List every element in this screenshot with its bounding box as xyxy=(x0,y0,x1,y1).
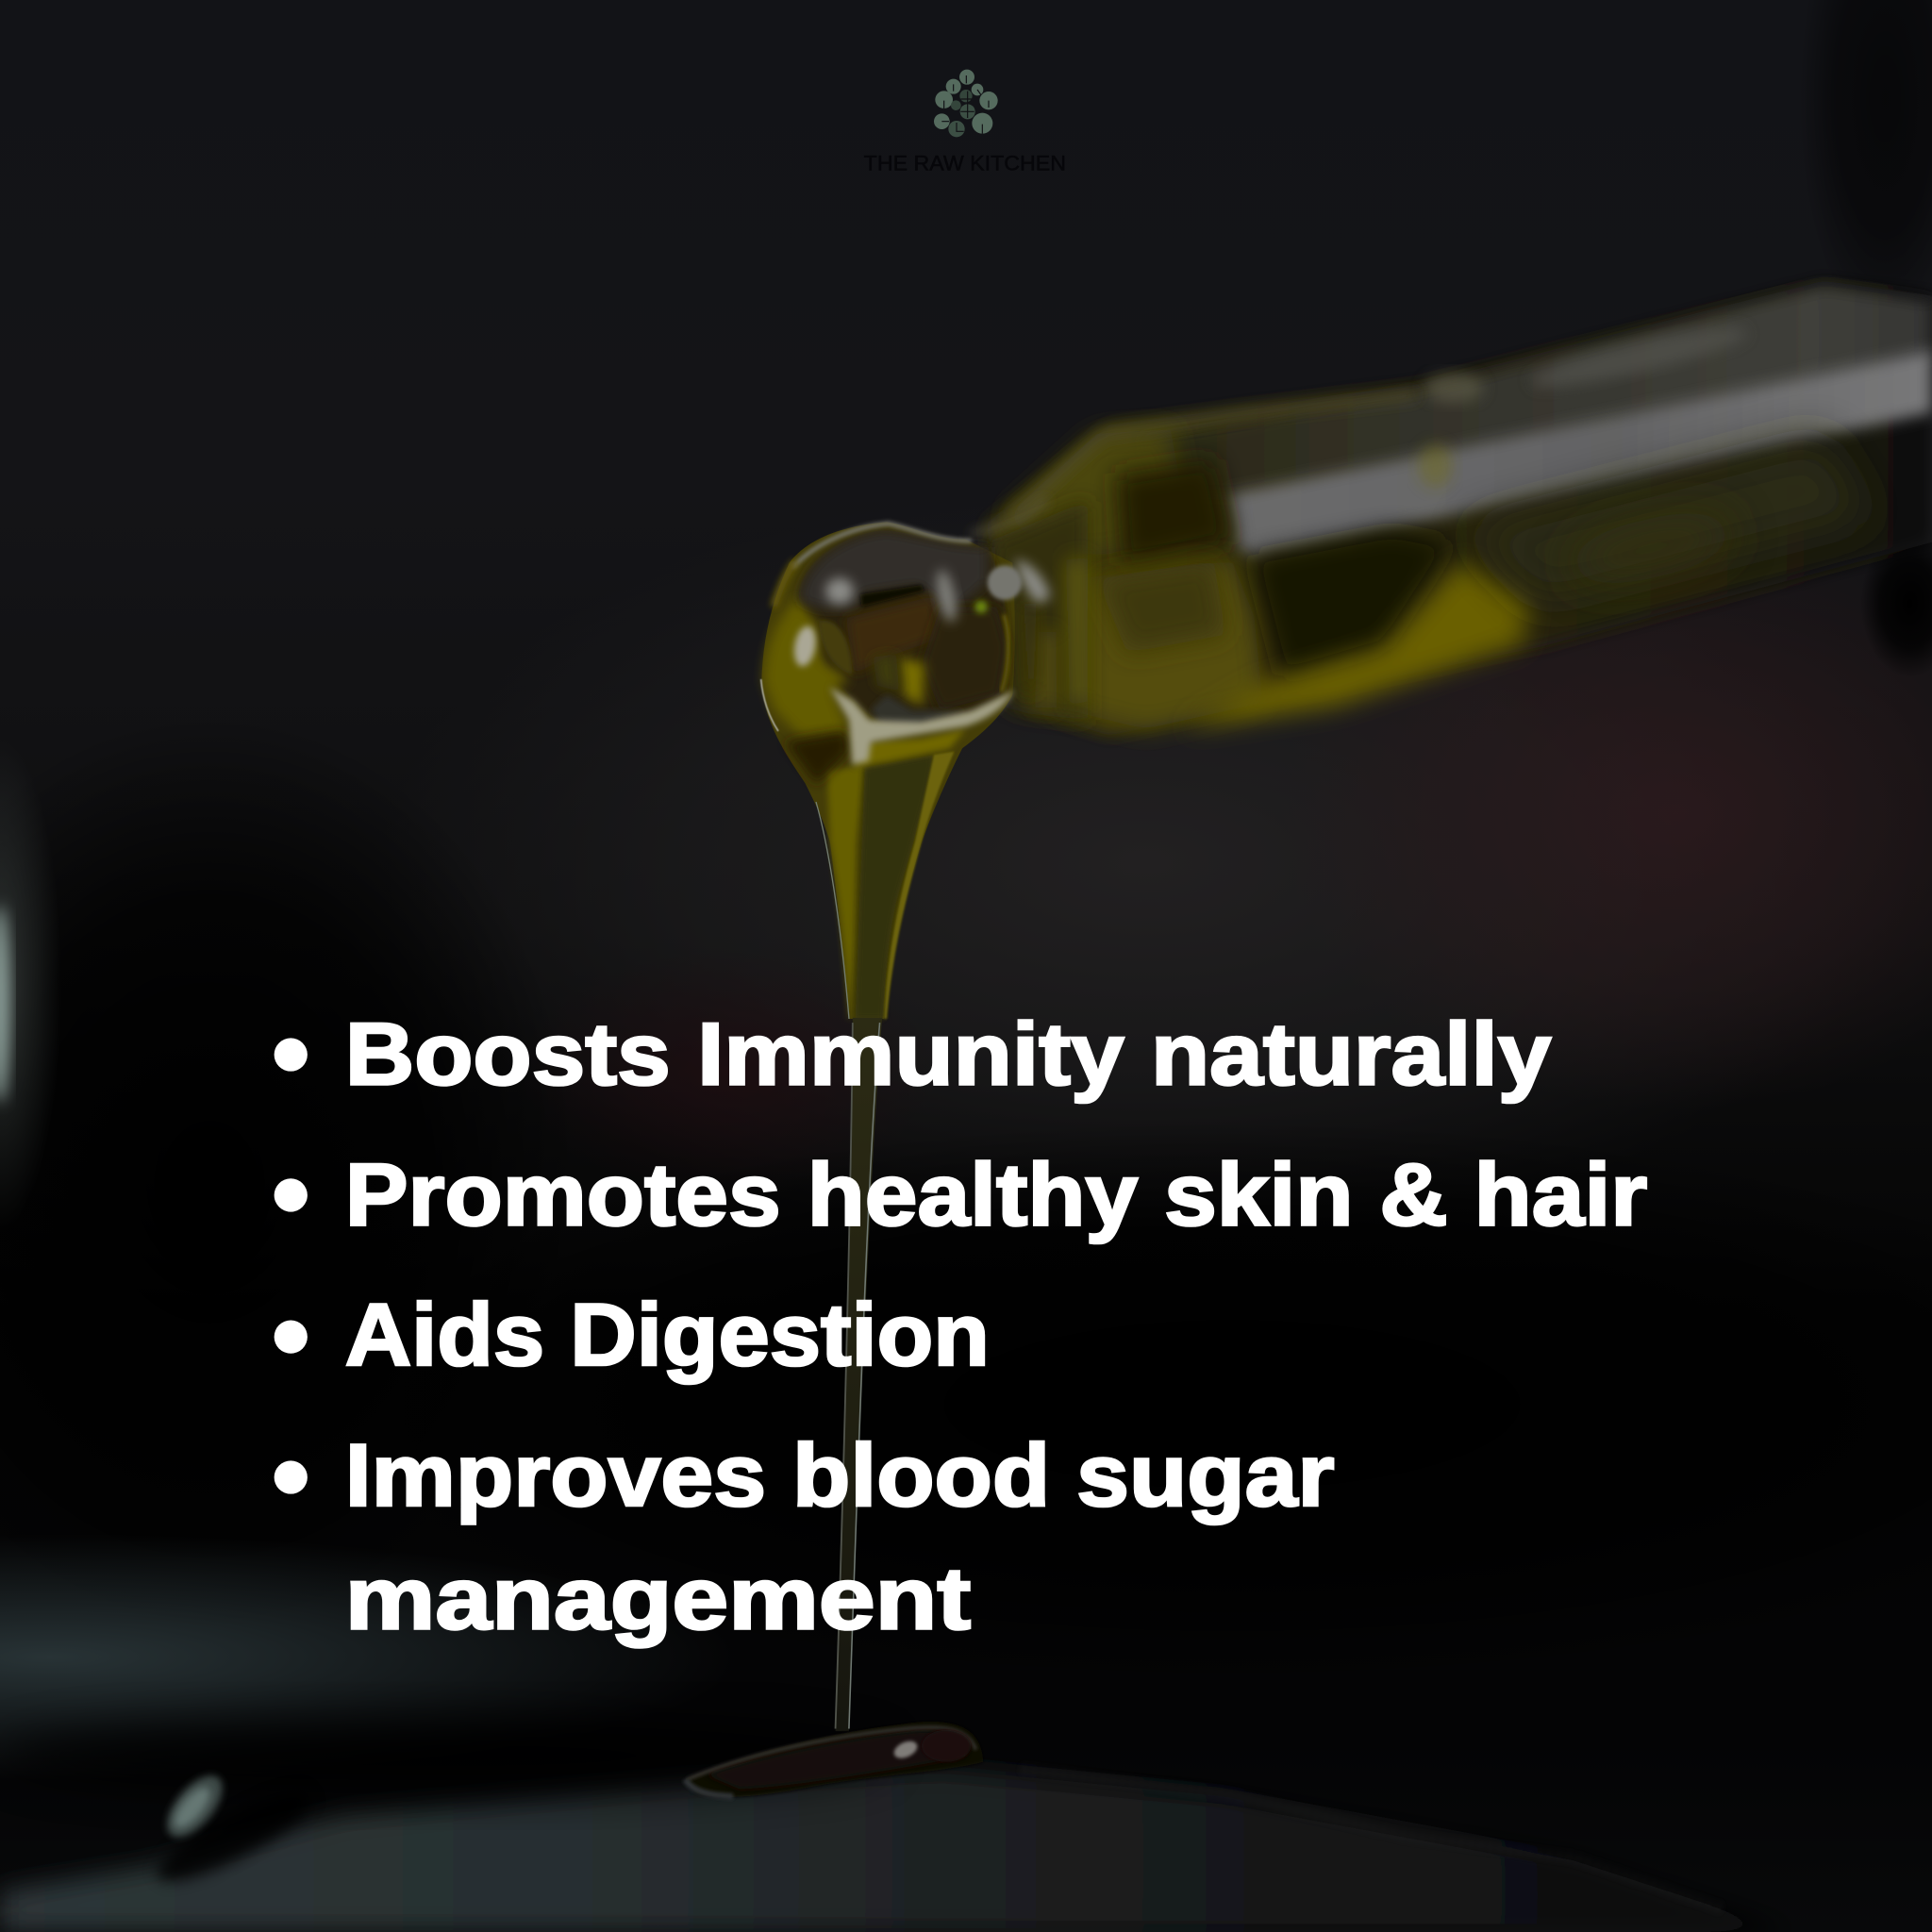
droplet body xyxy=(761,522,1015,1019)
benefits list xyxy=(275,1004,1647,1648)
white caustic xyxy=(829,687,1014,765)
rim highlight xyxy=(792,524,972,568)
benefit: blood sugar: Improves blood sugar xyxy=(345,1425,1335,1524)
yellow reflections xyxy=(899,658,924,706)
benefit: skin and hair: Promotes healthy skin & hair xyxy=(345,1144,1647,1243)
icon: oil droplet and falling stream xyxy=(761,500,1088,1019)
neck between droplet and bottle xyxy=(972,500,1088,720)
dark lower-left xyxy=(785,731,849,785)
small droplet xyxy=(147,1766,321,1896)
logo wordmark: THE RAW KITCHEN xyxy=(864,152,1066,175)
icon: glass dropper filled with oil xyxy=(986,281,1932,736)
grey lower reflection xyxy=(871,695,965,727)
icon: tree of leaves xyxy=(934,70,998,137)
icon: oil puddle and small droplet xyxy=(147,1722,983,1896)
benefit: blood sugar: management xyxy=(345,1549,971,1648)
icon: lower thin stream xyxy=(836,1018,882,1731)
puddle xyxy=(684,1722,983,1797)
benefit: immunity: Boosts Immunity naturally xyxy=(345,1004,1551,1103)
left yellow lobe xyxy=(764,599,851,736)
brown reflection xyxy=(846,596,941,675)
benefit: digestion: Aids Digestion xyxy=(345,1285,990,1384)
logo: The Raw Kitchen xyxy=(864,70,1066,175)
grey reflection top xyxy=(800,531,988,625)
benefit: blood sugar xyxy=(275,1425,1335,1648)
highlights xyxy=(791,625,819,668)
stream upper strips xyxy=(816,752,955,1019)
black reflection xyxy=(860,585,924,607)
inner refraction xyxy=(799,530,1008,726)
